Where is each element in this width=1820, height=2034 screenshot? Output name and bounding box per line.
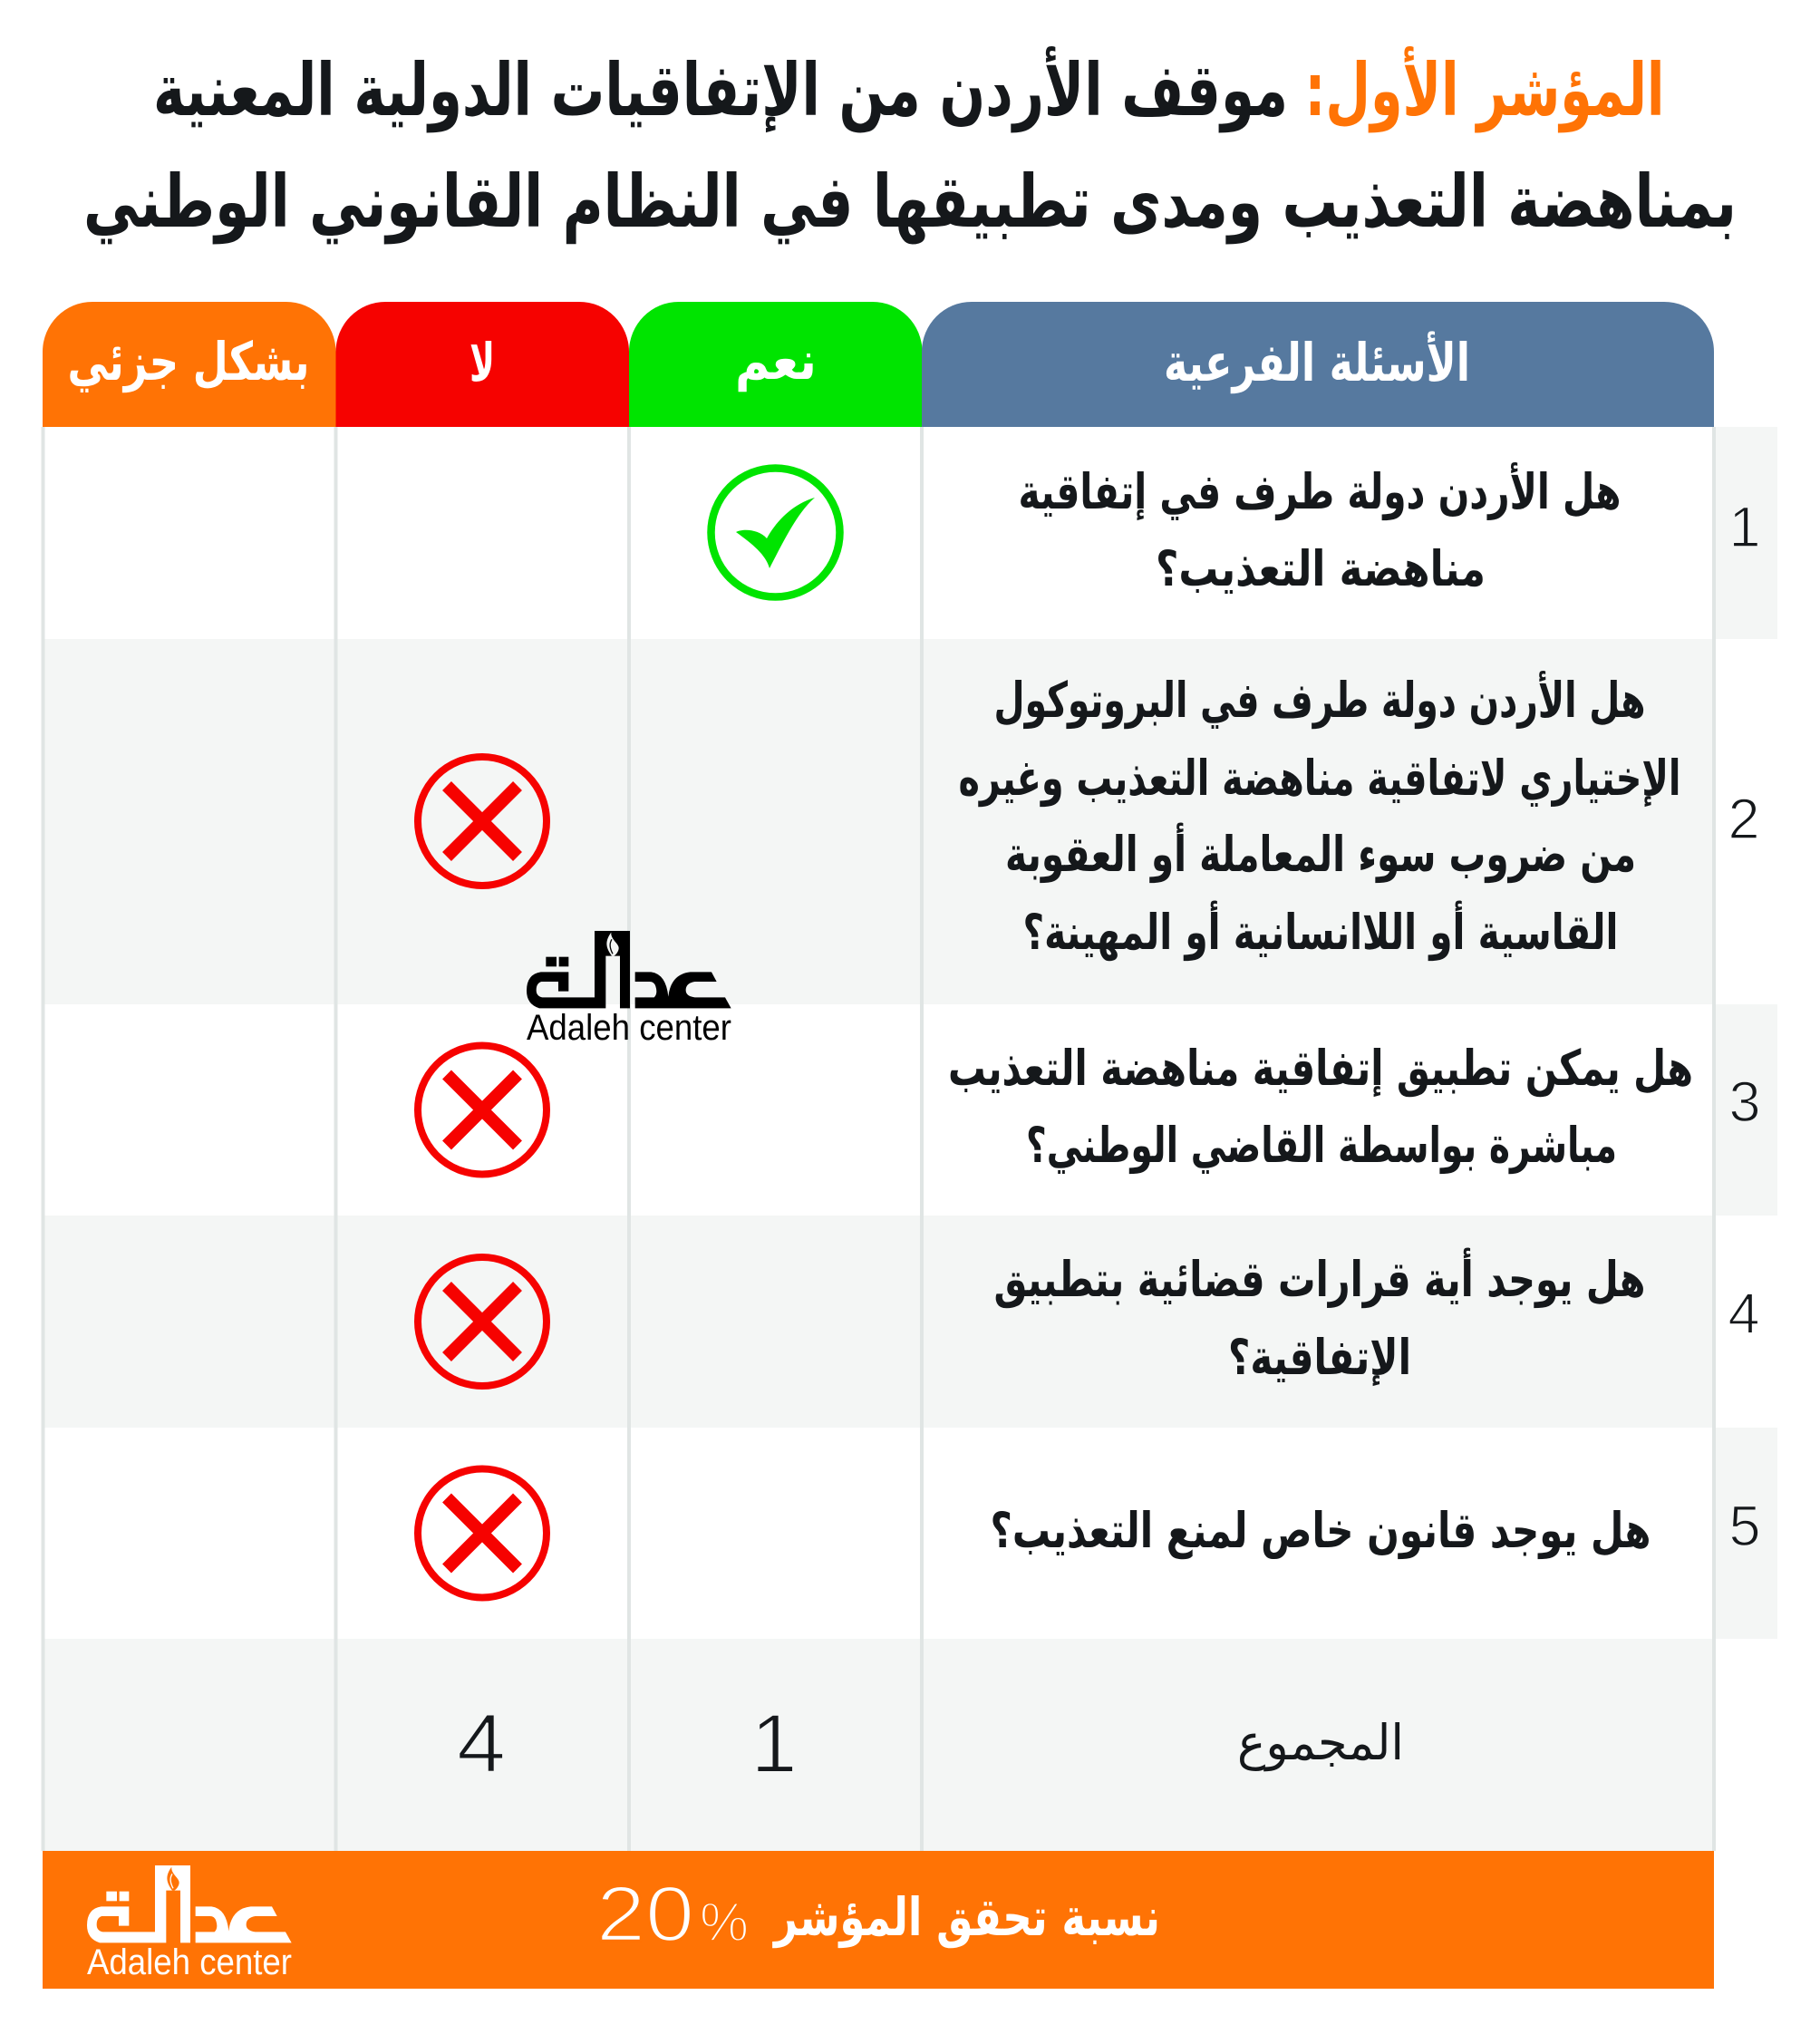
footer logo bbox=[87, 1865, 292, 1982]
row numbers: 5 bbox=[1728, 1495, 1761, 1558]
footer label: نسبة تحقق المؤشر bbox=[772, 1886, 1160, 1949]
title: المؤشر الأول: bbox=[1305, 46, 1664, 133]
question 2: من ضروب سوء المعاملة أو العقوبة bbox=[1005, 822, 1636, 883]
watermark logo bbox=[527, 931, 731, 1048]
total label: المجموع bbox=[1237, 1714, 1404, 1771]
row numbers: 4 bbox=[1728, 1283, 1760, 1346]
question 2 bbox=[959, 671, 1680, 961]
question 1: هل الأردن دولة طرف في إتفاقية bbox=[1019, 462, 1621, 520]
header: yes bbox=[629, 302, 923, 427]
icon: check bbox=[711, 468, 839, 596]
question 1 bbox=[1019, 462, 1621, 597]
header: sub-questions: الأسئلة الفرعية bbox=[1164, 331, 1470, 394]
question 1: مناهضة التعذيب؟ bbox=[1156, 540, 1486, 597]
footer percentage: 20 bbox=[596, 1871, 694, 1958]
title: موقف الأردن من الإتفاقيات الدولية المعنية bbox=[153, 46, 1288, 133]
header: no bbox=[335, 302, 629, 427]
icon: cross row 5 bbox=[418, 1468, 547, 1597]
question 5: هل يوجد قانون خاص لمنع التعذيب؟ bbox=[990, 1502, 1651, 1560]
row numbers: 1 bbox=[1728, 496, 1761, 559]
header: partial bbox=[43, 302, 335, 427]
header: no: لا bbox=[470, 332, 495, 393]
row numbers: 2 bbox=[1728, 788, 1760, 851]
question 3: مباشرة بواسطة القاضي الوطني؟ bbox=[1026, 1117, 1617, 1174]
icon: cross row 4 bbox=[418, 1257, 547, 1386]
icon: cross row 2 bbox=[418, 757, 547, 886]
footer logo: Adaleh center bbox=[87, 1942, 292, 1982]
total yes: 1 bbox=[750, 1698, 798, 1790]
title bbox=[83, 46, 1737, 245]
total no: 4 bbox=[457, 1698, 506, 1790]
question 2: القاسية أو اللاانسانية أو المهينة؟ bbox=[1022, 900, 1619, 961]
header: sub-questions bbox=[922, 302, 1714, 427]
header: partial: بشكل جزئي bbox=[67, 331, 310, 393]
icon: cross row 3 bbox=[418, 1046, 547, 1175]
row numbers bbox=[1728, 496, 1761, 1558]
question 4: الإتفاقية؟ bbox=[1228, 1329, 1411, 1386]
footer bar bbox=[43, 1851, 1714, 1989]
question 4: هل يوجد أية قرارات قضائية بتطبيق bbox=[993, 1247, 1646, 1308]
row numbers: 3 bbox=[1728, 1070, 1761, 1134]
header: yes: نعم bbox=[735, 330, 817, 392]
watermark logo: Adaleh center bbox=[527, 1008, 731, 1048]
footer percentage bbox=[596, 1871, 749, 1958]
question 3 bbox=[948, 1040, 1693, 1174]
table row backgrounds bbox=[42, 427, 1777, 1851]
footer percentage: % bbox=[700, 1892, 749, 1952]
question 4 bbox=[993, 1247, 1646, 1386]
